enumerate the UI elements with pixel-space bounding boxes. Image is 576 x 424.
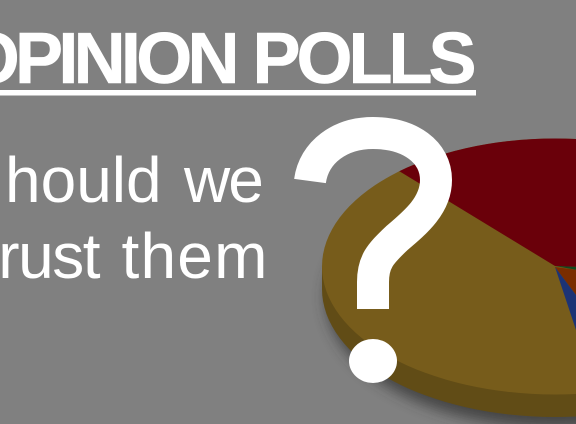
pie top: coloured slices [399, 138, 576, 330]
subtitle: them [122, 220, 269, 292]
title: POLLS [252, 19, 474, 99]
pie shadow [326, 166, 576, 424]
chart: 3D pie [322, 120, 576, 424]
title underline [0, 90, 476, 96]
subtitle: hould [5, 144, 162, 216]
subtitle [0, 144, 269, 292]
pie top: olive slice [322, 138, 576, 394]
pie side [322, 266, 576, 417]
subtitle: we [183, 144, 262, 216]
icon: question mark [310, 133, 436, 383]
